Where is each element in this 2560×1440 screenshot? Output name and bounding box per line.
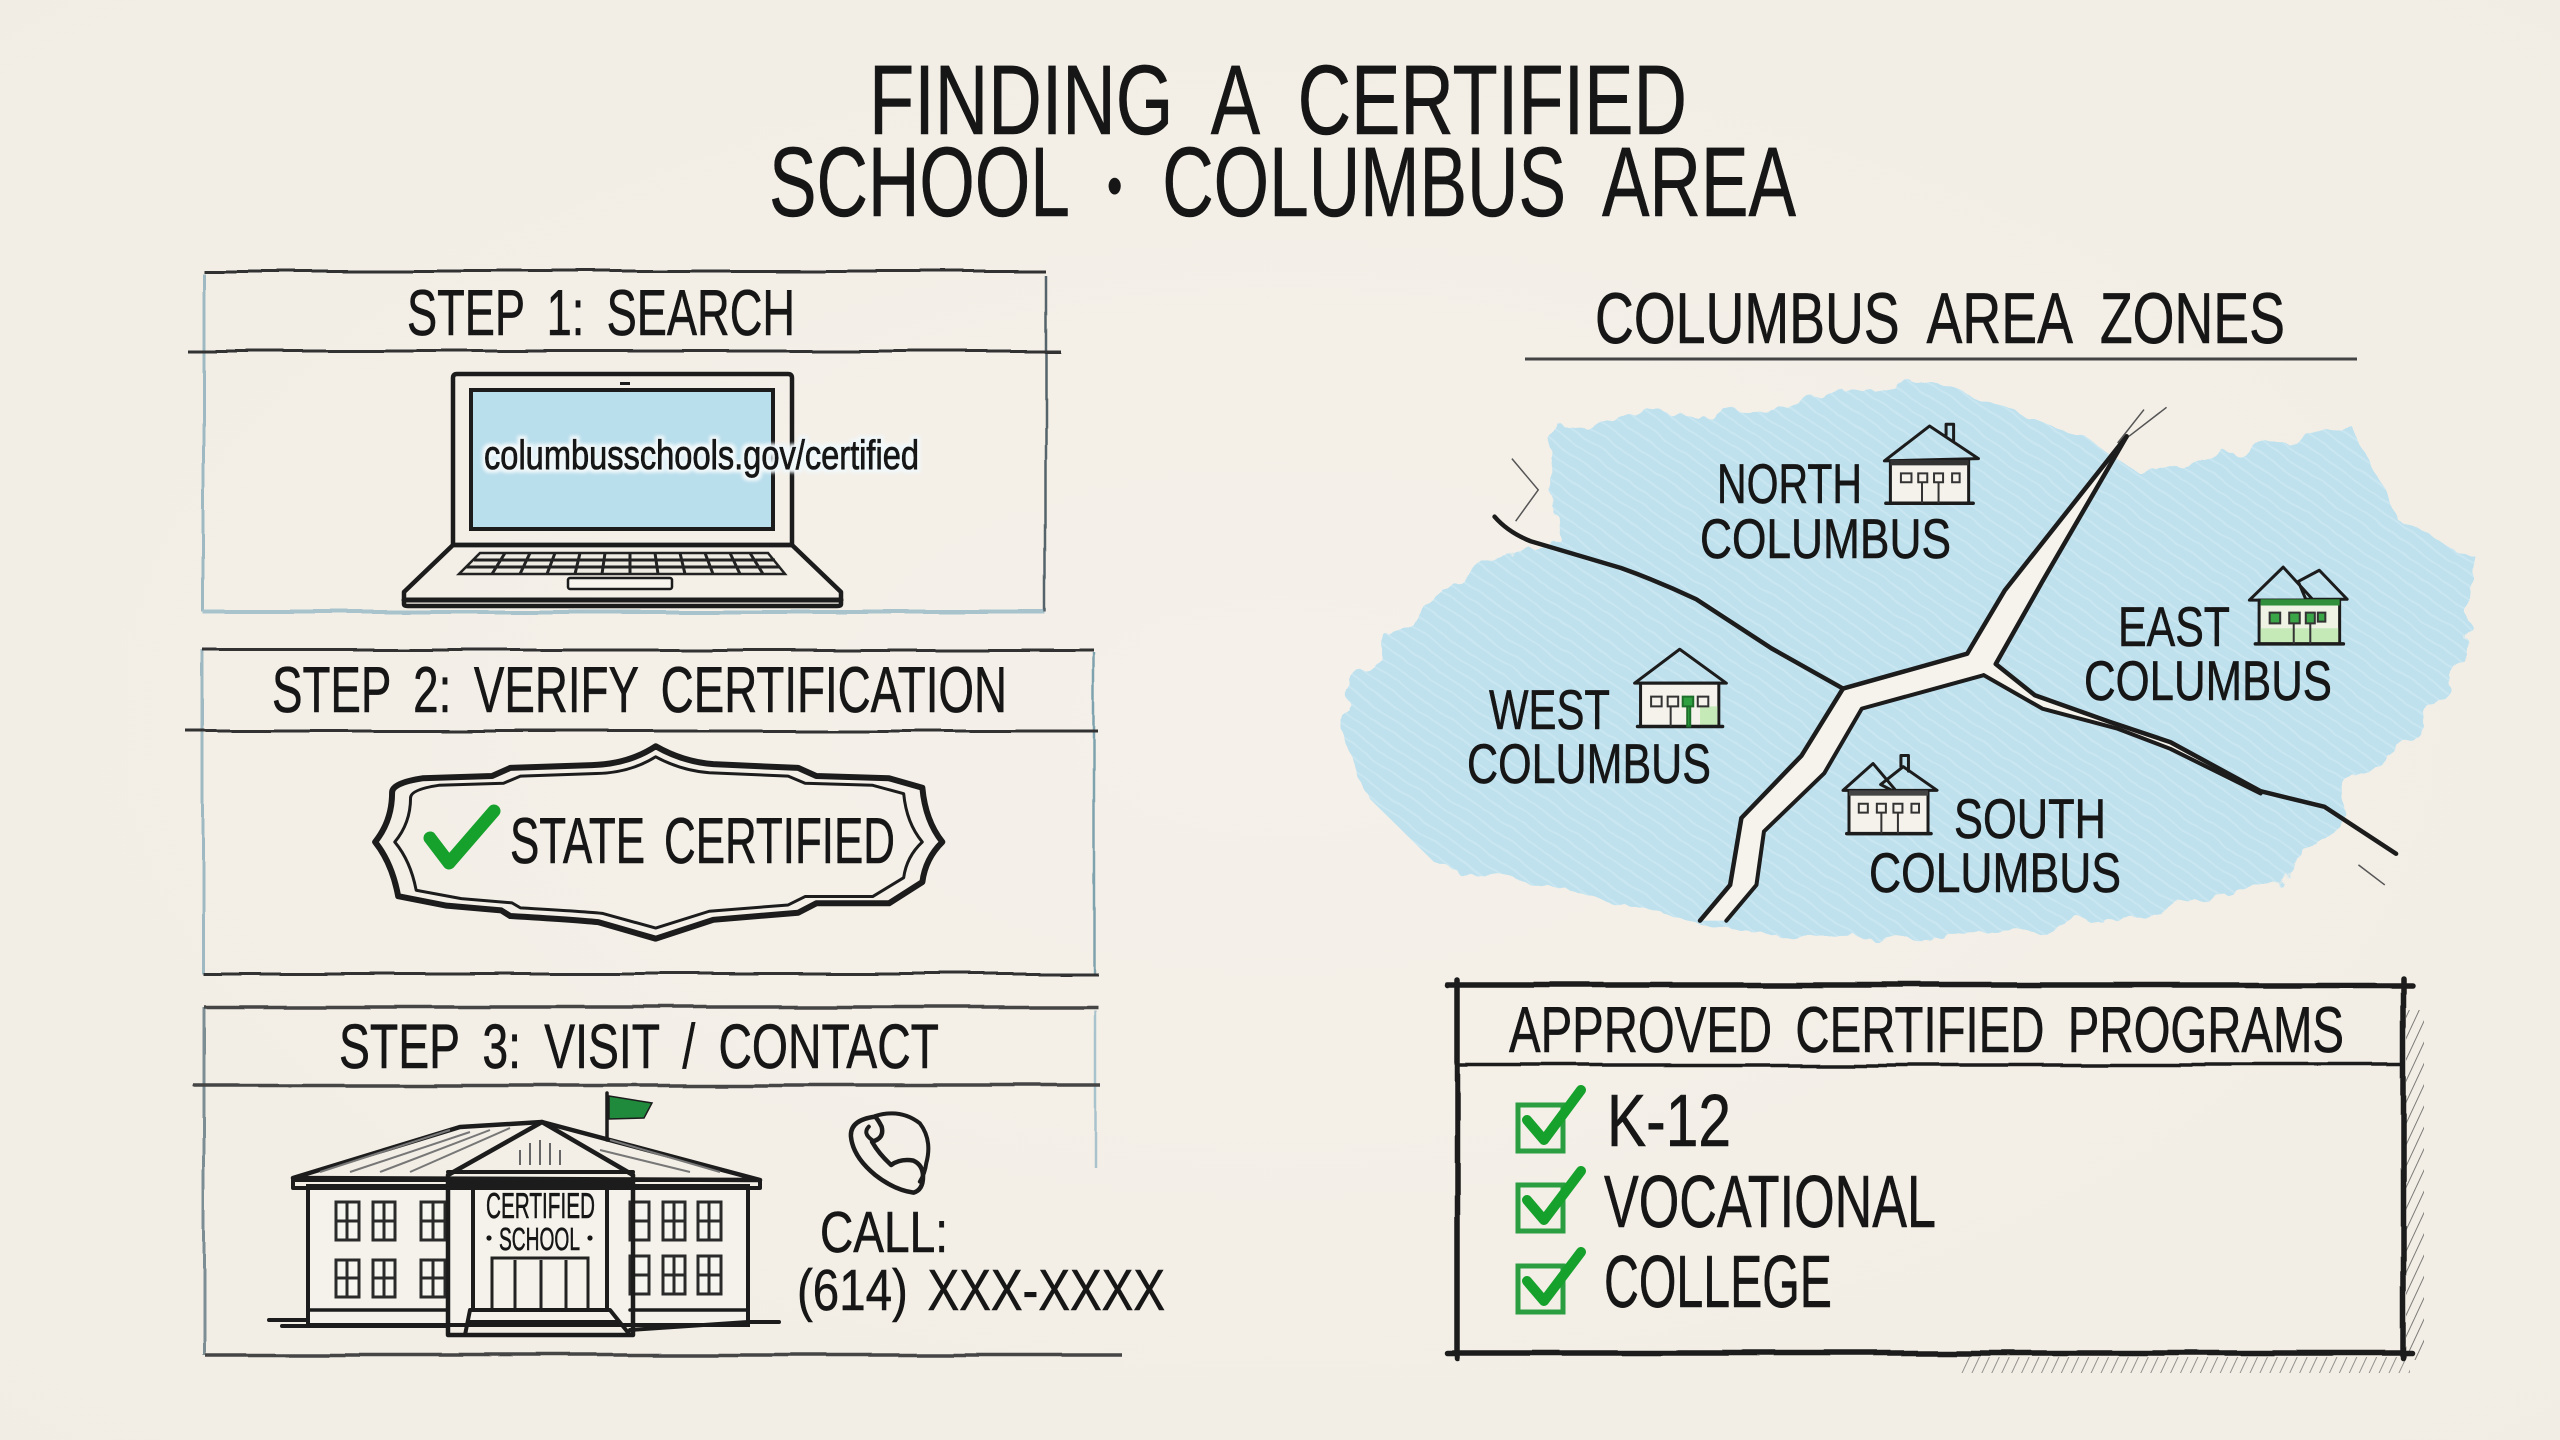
walls [308, 1186, 748, 1325]
call text [797, 1200, 1165, 1323]
title: • [1107, 152, 1122, 219]
icon: west house [1635, 649, 1726, 726]
panel: step 1 search [187, 271, 1060, 612]
step 1 frame [187, 271, 1060, 612]
icon: south house [1843, 756, 1937, 834]
icon: east house [2249, 567, 2347, 644]
icon: phone [851, 1113, 928, 1193]
url text: columbusschools.gov/certified [484, 432, 919, 478]
zone: east columbus: EAST [2118, 595, 2230, 658]
title: FINDING A CERTIFIED [869, 44, 1687, 155]
icon: green check [430, 811, 494, 863]
zone: north columbus: COLUMBUS [1700, 507, 1951, 570]
map area: blue crayon blob [1339, 379, 2474, 939]
school sign: CERTIFIED [486, 1185, 595, 1226]
zone: east columbus [2084, 567, 2347, 712]
zone: south columbus: COLUMBUS [1869, 841, 2121, 904]
zone: east columbus: COLUMBUS [2084, 649, 2332, 712]
school sign [486, 1185, 595, 1257]
step 1 heading: STEP 1: SEARCH [407, 276, 795, 349]
steps [465, 1310, 630, 1335]
icon: laptop [404, 374, 841, 606]
door [492, 1258, 588, 1310]
ground line [269, 1320, 779, 1330]
portico [448, 1122, 633, 1335]
zone: west columbus: COLUMBUS [1467, 732, 1711, 795]
windows [336, 1202, 721, 1297]
programs frame [1447, 978, 2412, 1358]
panel: columbus area zones [1339, 279, 2474, 939]
zones heading: COLUMBUS AREA ZONES [1595, 279, 2285, 359]
school sign: SCHOOL [499, 1221, 580, 1257]
title: SCHOOL [769, 126, 1183, 237]
zone: west columbus [1467, 649, 1726, 795]
panel: approved certified programs [1447, 978, 2424, 1373]
panel: step 3 visit / contact [193, 1007, 1165, 1355]
panel: step 2 verify certification [186, 650, 1098, 974]
badge label: STATE CERTIFIED [510, 804, 895, 877]
zone: west columbus: WEST [1489, 678, 1610, 741]
shadow hatching [1960, 1010, 2424, 1373]
step 3 heading: STEP 3: VISIT / CONTACT [339, 1012, 939, 1082]
roof [293, 1122, 760, 1180]
title: COLUMBUS AREA [1162, 126, 1796, 237]
zone: north columbus: NORTH [1717, 452, 1862, 515]
step 2 heading: STEP 2: VERIFY CERTIFICATION [272, 653, 1007, 726]
step 2 frame [186, 650, 1098, 974]
icon: north house [1884, 424, 1978, 503]
map [1339, 379, 2474, 939]
icon: certified badge [375, 746, 942, 939]
icon: school building [269, 1093, 779, 1335]
zone: south columbus: SOUTH [1954, 787, 2106, 850]
item: k-12 [1518, 1079, 1731, 1162]
item: vocational [1518, 1160, 1936, 1243]
item: k-12: K-12 [1607, 1079, 1731, 1162]
roads [1495, 407, 2396, 921]
call text: (614) XXX-XXXX [797, 1258, 1165, 1323]
zone: south columbus [1843, 756, 2121, 904]
step 3 frame [193, 1007, 1122, 1355]
zone: north columbus [1700, 424, 1978, 570]
item: college [1518, 1240, 1832, 1323]
item: vocational: VOCATIONAL [1604, 1160, 1936, 1243]
flag [607, 1093, 652, 1140]
title [769, 44, 1796, 237]
item: college: COLLEGE [1604, 1240, 1832, 1323]
call text: CALL: [820, 1200, 948, 1265]
